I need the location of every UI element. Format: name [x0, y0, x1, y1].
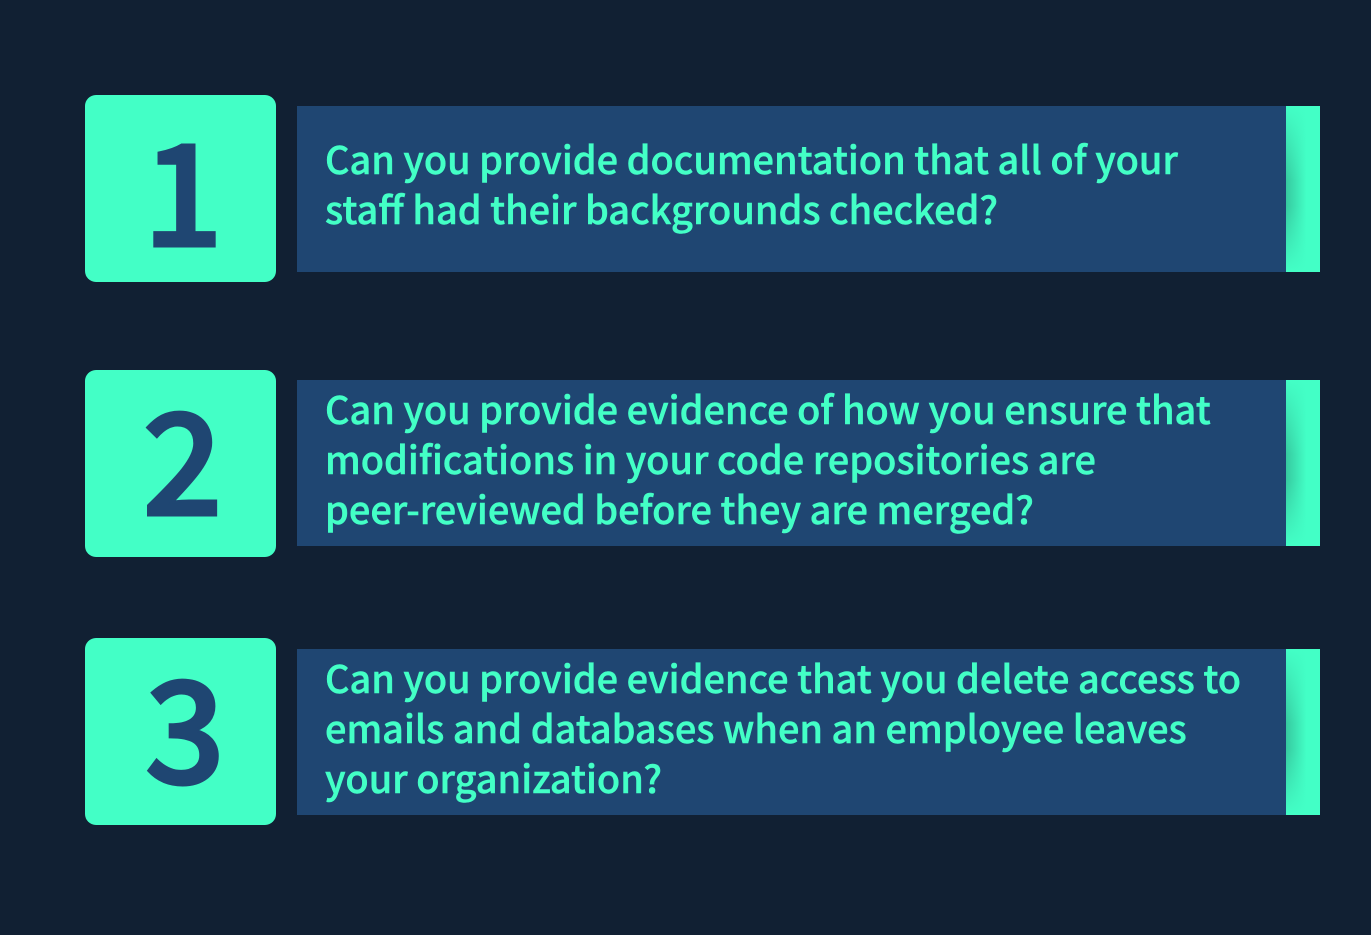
number badge 2 [85, 370, 276, 557]
question 3 text: emails and databases when an employee leaves [325, 699, 1187, 754]
number badge 1: 1 [143, 82, 223, 286]
question 2 text [325, 380, 1211, 535]
question 2 text: peer-reviewed before they are merged? [325, 480, 1034, 535]
number badge 3 [85, 638, 276, 825]
panel: question 3 [297, 649, 1320, 815]
question 1 text: staff had their backgrounds checked? [325, 180, 998, 235]
panel: question 1 [297, 106, 1320, 272]
accent tab 2 [1286, 380, 1320, 546]
number badge 3: 3 [145, 619, 225, 824]
number badge 2: 2 [142, 350, 223, 556]
question 2 text: Can you provide evidence of how you ensure that [325, 380, 1211, 435]
question 2 text: modifications in your code repositories are [325, 430, 1096, 485]
question 3 text: Can you provide evidence that you delete access to [325, 649, 1241, 704]
question 1 text [325, 130, 1178, 235]
question 3 text [325, 649, 1241, 804]
panel: question 2 [297, 380, 1320, 546]
question 3 text: your organization? [325, 749, 662, 804]
number badge 1 [85, 95, 276, 282]
question 1 text: Can you provide documentation that all of your [325, 130, 1178, 185]
accent tab 3 [1286, 649, 1320, 815]
accent tab 1 [1286, 106, 1320, 272]
